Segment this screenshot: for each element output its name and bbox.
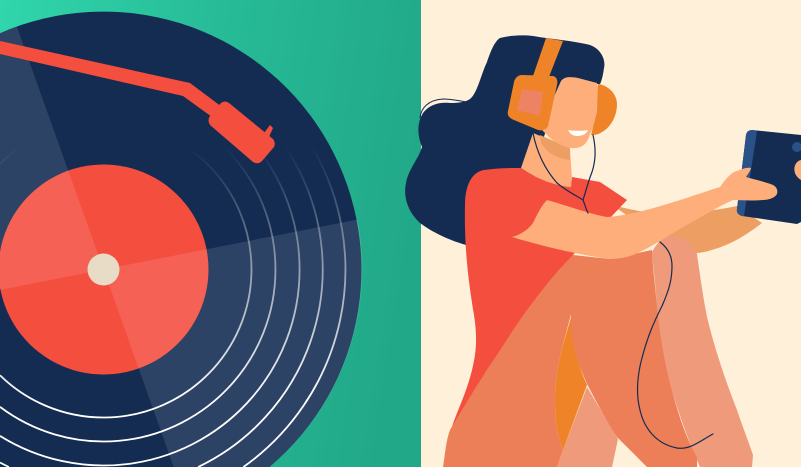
shirt <box>450 168 627 433</box>
lighter lower leg right <box>652 236 753 467</box>
light reflection sector upper left <box>0 26 104 290</box>
thigh <box>443 250 697 467</box>
tablet body <box>737 130 801 224</box>
face <box>540 77 599 148</box>
record grooves <box>0 28 345 467</box>
arm <box>0 41 222 117</box>
tablet button <box>792 142 801 152</box>
headband <box>533 38 563 82</box>
panel: teal background <box>0 0 421 467</box>
neck shadow <box>540 135 570 160</box>
tablet <box>737 130 801 224</box>
spindle hub <box>88 254 120 286</box>
woman with headphones <box>405 35 801 467</box>
right ear cup <box>591 84 617 135</box>
hair <box>405 35 604 246</box>
vinyl record <box>0 12 362 467</box>
left ear cup <box>508 75 557 130</box>
far arm <box>612 205 762 253</box>
tablet spine <box>737 130 757 216</box>
tonearm <box>0 41 275 163</box>
smile <box>568 130 588 136</box>
hair strand <box>420 99 467 118</box>
fingers at tablet edge <box>794 160 801 180</box>
front arm and hand <box>512 168 777 259</box>
cartridge head <box>208 102 275 163</box>
panel: cream background <box>421 0 801 467</box>
ear cup inner pad <box>517 89 543 116</box>
lighter lower leg left <box>557 387 618 467</box>
headphones <box>508 38 617 135</box>
light reflection sector lower right <box>104 220 362 467</box>
neck <box>521 133 572 187</box>
centre label <box>0 165 208 375</box>
orange inner shadow <box>555 314 587 450</box>
record disc <box>0 12 361 467</box>
stylus nub <box>264 125 273 137</box>
headphone cable <box>533 133 713 448</box>
